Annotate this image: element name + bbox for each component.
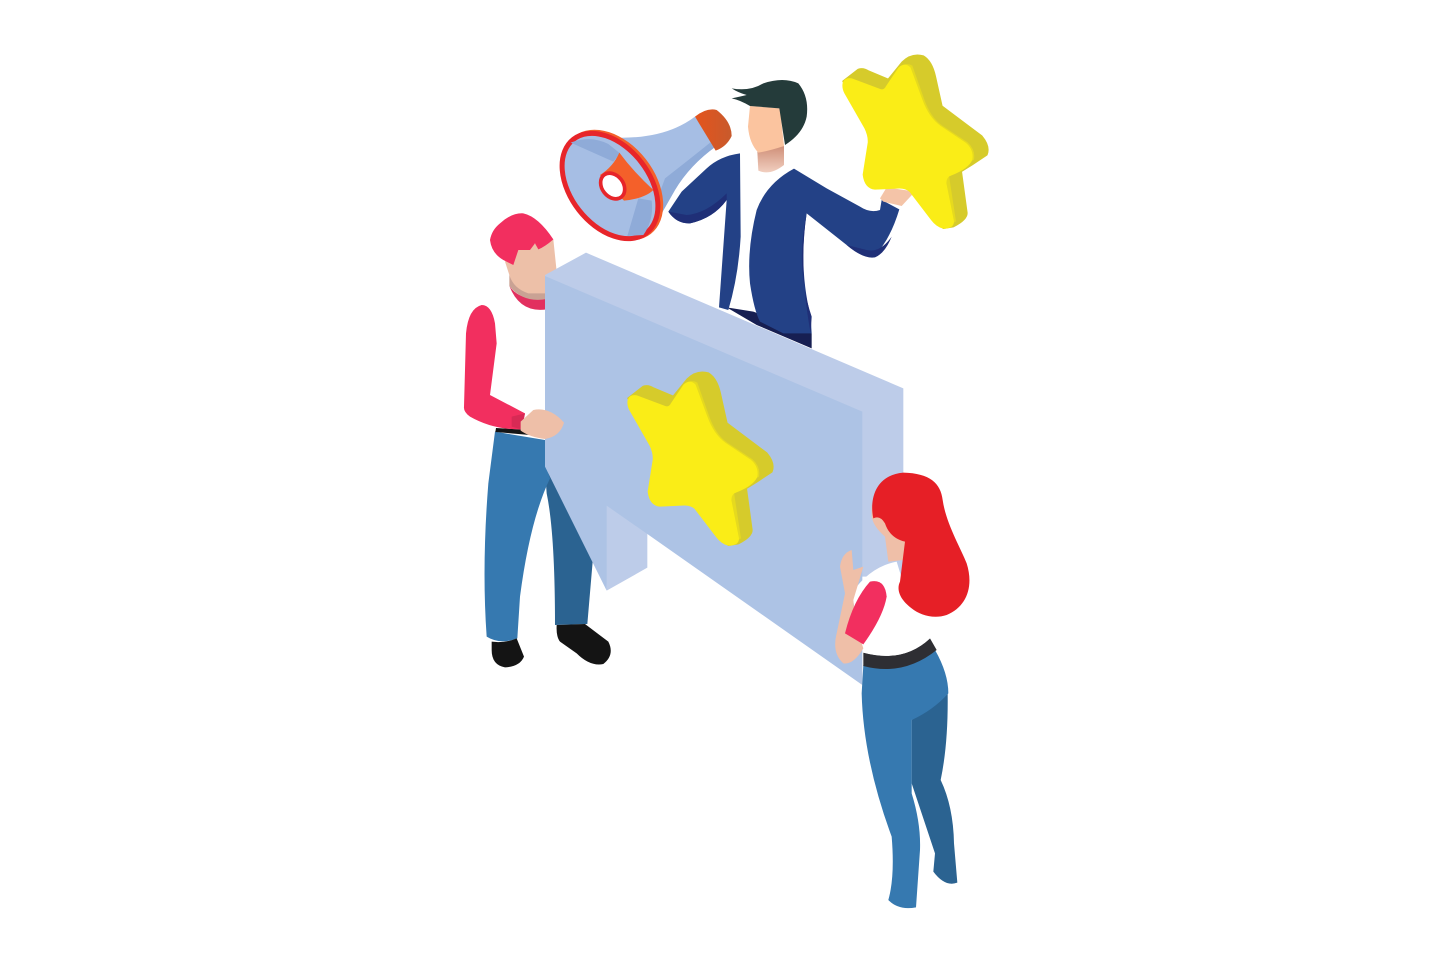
megaphone [541,109,732,260]
inner shading [571,139,652,236]
belt [863,638,937,669]
belt [495,428,530,435]
figure: man with megaphone [668,80,915,348]
hip and front leg [862,650,948,908]
neck [757,146,784,172]
front leg [485,432,550,641]
arm sleeve [464,305,525,429]
face [505,239,557,293]
orange outer rim [541,110,684,260]
collar [509,286,547,310]
shirt [728,152,795,313]
trousers waist [727,307,812,348]
neck and cheek [872,503,907,562]
right shoe [557,624,611,664]
neck ring [695,109,732,151]
figure: woman with red hair [835,473,969,908]
jacket left side and arm [668,153,741,310]
hair [490,213,553,265]
bell opening [542,115,678,257]
held star [843,55,988,228]
megaphone body [608,117,716,213]
bubble tail side [605,503,647,591]
bubble top and right side [545,253,903,577]
jacket right side and arm [749,169,899,333]
inner cone [600,153,653,201]
speaker ring [596,168,630,204]
body shading [658,141,716,213]
star depth [843,55,988,228]
back leg [912,693,957,884]
hand [880,187,915,206]
forearm and hand [835,550,863,663]
left shoe [492,638,524,667]
hand on bubble [512,409,564,439]
face [748,106,784,153]
back leg [545,467,593,625]
star face [628,382,757,545]
figure: man in red sweater [464,213,611,667]
star depth [628,372,773,545]
jacket shading [668,193,892,333]
shirt [852,562,930,656]
hair [732,80,807,145]
speech bubble [545,253,903,685]
sleeve cuff [512,413,525,429]
sleeve [845,581,887,644]
star face [843,65,972,228]
hand shape [521,409,564,439]
star edge [899,64,974,228]
neck shadow [509,275,547,300]
star on bubble [628,372,773,545]
bubble front [545,276,862,685]
long hair [872,473,969,617]
star edge [684,381,759,545]
